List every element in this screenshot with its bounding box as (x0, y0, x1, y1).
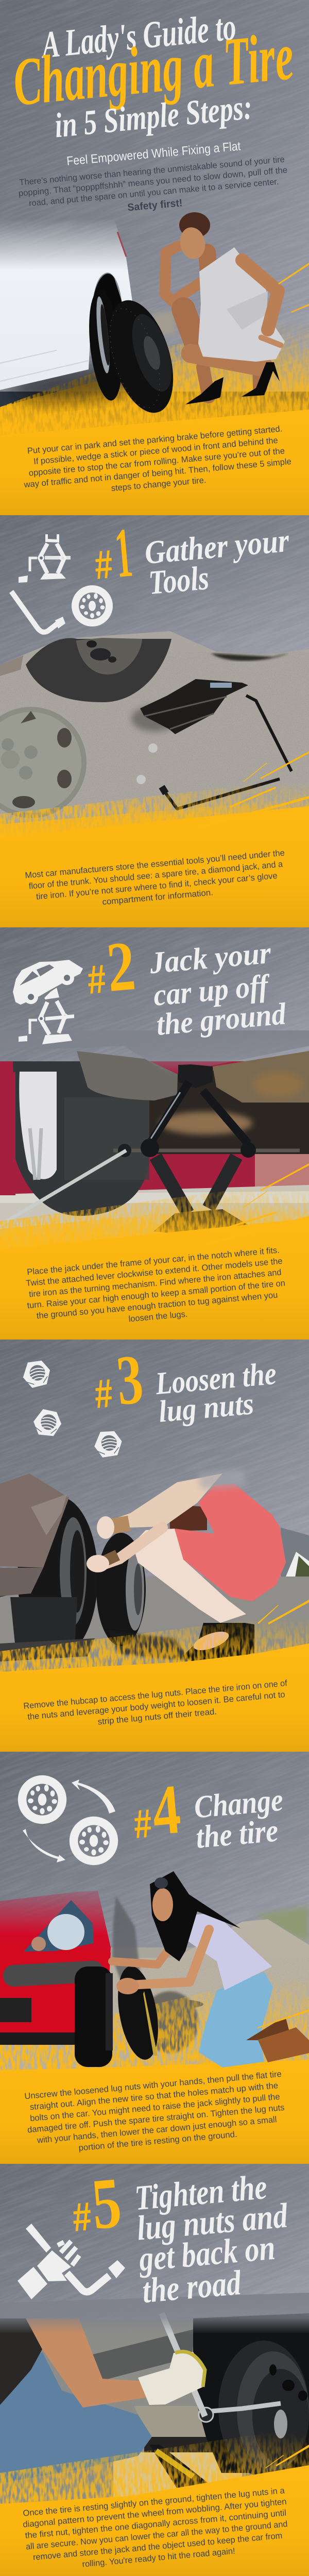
streaks (258, 1600, 309, 1624)
heading step 3 (153, 1356, 278, 1429)
photo: wheel with rim (193, 2313, 309, 2477)
heading step 1: Tools (147, 559, 211, 602)
step number 1: # (93, 541, 114, 588)
step number 5: # (71, 2193, 93, 2240)
heading step 2: the ground (155, 996, 288, 1042)
step 1 text: floor of the trunk. You should see: a spare tire, a diamond jack, and a (28, 859, 284, 891)
heading step 2: car up off (152, 968, 272, 1012)
step 1 fade to yellow (0, 778, 309, 845)
panel: step 5 tighten the lug nuts (0, 2163, 309, 2576)
step 4 text: straight out. Align the new tire so that the holes match up with the (29, 2080, 279, 2112)
subtitle: Feel Empowered While Fixing a Flat (66, 139, 242, 168)
step 3 text: strip the lug nuts off their tread. (97, 1706, 217, 1726)
step 4 fade to yellow (0, 1968, 309, 2076)
step 3 text (23, 1678, 289, 1733)
photo: gravel ground (0, 631, 309, 845)
streaks (278, 263, 309, 313)
step 2 text: tire iron as the turning mechanism. Find where the iron attaches and (28, 1267, 282, 1299)
icon: jack (19, 534, 71, 583)
step 5 text (22, 2485, 291, 2574)
photo: lug nuts (136, 743, 158, 784)
panel: step 4 change the tire (0, 1752, 309, 2164)
step number 3: # (93, 1370, 114, 1417)
panel: step 2 jack your car (0, 926, 309, 1340)
photo: shirt (0, 2318, 42, 2405)
intro paragraph: popping. That “popppffshhh” means you need to slow down, pull off the (18, 165, 288, 198)
step 1 text: Most car manufacturers store the essential tools you’ll need under the (25, 848, 285, 880)
photo: jeans (0, 2352, 152, 2483)
step 1 text: compartment for information. (102, 887, 214, 907)
step 2 fade to yellow (0, 1180, 309, 1267)
step 5 top fade (0, 2293, 309, 2334)
intro paragraph: There’s nothing worse than hearing the unmistakable sound of your tire (19, 155, 285, 188)
heading step 5: the road (141, 2263, 243, 2310)
step 5 text: diagonal pattern to prevent the wheel from wobbling. After you tighten (23, 2497, 287, 2530)
step 2 text: turn. Raise your car high enough to keep a small portion of the tire on (27, 1278, 286, 1310)
photo: ground shadow (108, 1631, 191, 1662)
yellow band (0, 1643, 309, 1752)
photo: mountains, house, road (0, 1528, 309, 1680)
photo: scissor jack and handle (131, 679, 291, 771)
icon: hand with wrench (18, 2224, 125, 2299)
step 2 text: Place the jack under the frame of your car, in the notch where it fits. (27, 1245, 280, 1277)
intro yellow paragraph: opposite tire to stop the car from rolling. Make sure you’re out of the (28, 446, 285, 478)
heading step 3: Loosen the (153, 1356, 278, 1401)
step 1 background (0, 515, 309, 665)
step 3 text: Remove the hubcap to access the lug nuts. Place the tire iron on one of (23, 1678, 288, 1711)
intro yellow paragraph: Put your car in park and set the parking brake before getting started. (27, 423, 283, 456)
photo: car side and ground (0, 2313, 309, 2524)
step number 3 (93, 1340, 146, 1420)
step 4 text: with your hands, then lower the car down just enough so a small (36, 2114, 277, 2145)
step number 5: 5 (89, 2163, 124, 2245)
step number 5 (71, 2163, 124, 2245)
step 4 text: bolts on the car. You might need to raise the jack slightly to pull the (29, 2092, 280, 2123)
yellow band (0, 806, 309, 927)
panel: step 3 loosen the lug nuts (0, 1340, 309, 1752)
step number 4 (132, 1770, 183, 1850)
heading step 1 (143, 522, 291, 602)
icon: two wheels swap (18, 1775, 118, 1865)
panel: step 1 gather your tools (0, 513, 309, 927)
photo: brown car (0, 1473, 146, 1657)
photo: lever rod (0, 1150, 126, 1225)
step 4 text: damaged tire off. Push the spare tire straight on. Tighten the lug nuts (27, 2103, 285, 2134)
photo: red car (0, 1891, 140, 2067)
icon: wheel (72, 585, 113, 626)
icons: lug nuts (21, 1359, 123, 1458)
step 4 text: Unscrew the loosened lug nuts with your hands, then pull the flat tire (24, 2069, 282, 2101)
step 2 text: Twist the attached lever clockwise to extend it. Other models use the (26, 1256, 283, 1288)
road fade and horizon (0, 309, 309, 453)
intro paragraph: Safety first! (127, 197, 183, 213)
step 1 text: tire iron. If you’re not sure where to find it, check your car’s glove (36, 871, 278, 902)
icon: car on jack (13, 960, 83, 1044)
photo: wall and ground (0, 1061, 309, 1257)
step number 3: 3 (113, 1340, 146, 1420)
panel: intro (0, 0, 309, 515)
yellow band (0, 2060, 309, 2164)
streaks (203, 1163, 309, 1246)
step 3 background (0, 1340, 309, 1577)
photo: car with spare tire (0, 219, 185, 420)
step number 1 (93, 513, 135, 592)
step 5 text: Once the tire is resting slightly on the ground, tighten the lug nuts in a (23, 2485, 285, 2518)
photo: hubcap on ground (0, 1638, 95, 1662)
step number 4: 4 (149, 1770, 183, 1850)
intro yellow paragraph: steps to change your tire. (111, 475, 207, 493)
step number 2: 2 (104, 926, 138, 1007)
step 4 text: portion of the tire is resting on the ground. (78, 2129, 237, 2153)
heading step 2: Jack your (148, 936, 272, 980)
step number 1: 1 (112, 513, 135, 592)
photo: scissor jack (113, 1064, 300, 1235)
heading step 1: Gather your (143, 522, 291, 571)
step 2 text: the ground so you have enough traction to tug against when you (36, 1290, 278, 1321)
streaks (198, 751, 309, 828)
step 5 background (0, 2164, 309, 2329)
photo: woman kneeling (112, 1871, 309, 2067)
heading step 4: Change (193, 1783, 284, 1825)
title line 3: in 5 Simple Steps: (53, 87, 254, 145)
step 4 background (0, 1752, 309, 2081)
streaks (170, 2009, 309, 2070)
step 3 fade to yellow (0, 1613, 309, 1685)
photo: spare tire (112, 1963, 164, 2063)
photo: road and grass (0, 1906, 309, 2076)
intro yellow paragraph (20, 423, 293, 501)
photo: arm and glove (26, 2313, 205, 2416)
photo: car wheel (0, 1061, 149, 1216)
yellow band (0, 2465, 309, 2576)
intro paragraph: road, and put the spare on until you can make it to a service center. (28, 177, 279, 208)
photo: woman in pink dress loosening lug nuts (87, 1468, 286, 1663)
step 2 background (0, 927, 309, 1077)
photo: hubcap (0, 707, 87, 818)
heading step 4: the tire (195, 1813, 280, 1855)
step number 2: # (85, 956, 108, 1003)
intro yellow paragraph: way of traffic and not in danger of being hit. Then, follow these 5 simple (23, 456, 292, 489)
photo: jack (149, 2445, 221, 2494)
heading step 5: get back on (136, 2228, 277, 2279)
step 4 text (24, 2069, 287, 2157)
step 5 text: remove and store the jack and the object used to keep the car from (32, 2531, 283, 2562)
heading step 5: Tighten the (133, 2167, 268, 2217)
step 2 text (24, 1245, 287, 1332)
step number 4: # (132, 1800, 153, 1847)
heading step 5 (133, 2167, 289, 2310)
photo: car tire (0, 638, 288, 702)
yellow band (0, 1218, 309, 1340)
step 5 fade to yellow (0, 2427, 309, 2524)
heading step 4 (193, 1783, 284, 1855)
intro yellow paragraph: If possible, wedge a stick or piece of wood in front and behind the (33, 435, 278, 466)
yellow band (0, 410, 309, 515)
intro paragraph (17, 154, 290, 223)
streaks (265, 2445, 309, 2468)
heading step 2 (148, 936, 288, 1042)
photo: worried woman crouching (165, 212, 285, 404)
icon: lug wrench (11, 591, 65, 632)
intro background (0, 0, 309, 392)
step 5 text: rolling. You're ready to hit the road again! (82, 2546, 235, 2569)
step 3 text: the nuts and leverage your body weight to loosen it. Be careful not to (27, 1689, 285, 1722)
photo: car underbody (77, 1051, 309, 1103)
step 1 text (25, 848, 288, 913)
title (10, 6, 297, 145)
heading step 3: lug nuts (157, 1386, 255, 1429)
photo: grey fade over car (0, 1030, 309, 1074)
step 5 text: the first nut, tighten the one diagonally across from it, continuing until (25, 2508, 287, 2540)
step number 2 (85, 926, 138, 1007)
step 5 text: all are secure. Now you can lower the car all the way to the ground and (25, 2519, 288, 2552)
photo: tire iron (162, 779, 280, 809)
step 2 text: loosen the lugs. (128, 1309, 188, 1324)
